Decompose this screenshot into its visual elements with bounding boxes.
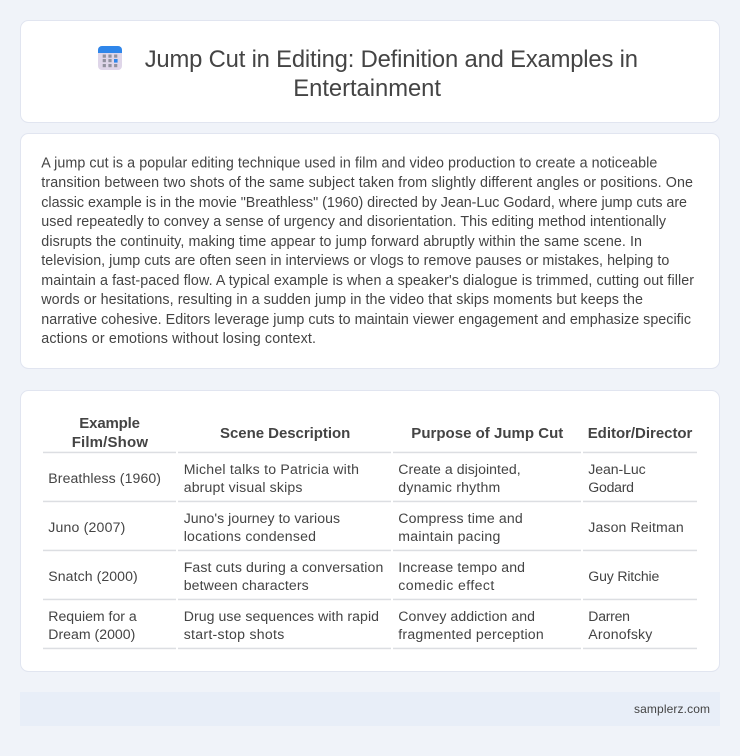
row: Requiem for a Dream: Darren xyxy=(588,608,630,624)
title xyxy=(145,46,638,102)
description text: classic example is in the movie "Breathless" (1960) directed by Jean-Luc Godard, where jump cuts are xyxy=(41,195,687,211)
icon: calendar xyxy=(98,46,122,70)
description text: maintain a fast-paced flow. A typical example is when a speaker's dialogue is trimmed, cutting out filler xyxy=(41,273,694,289)
row: Juno: Jason Reitman xyxy=(588,519,684,535)
table header: Film/Show xyxy=(72,434,148,451)
panel: examples table xyxy=(20,390,720,672)
row: Requiem for a Dream: start-stop shots xyxy=(184,626,284,642)
table header: Editor/Director xyxy=(588,425,693,442)
description text: disrupts the continuity, making time appear to jump forward abruptly within the same scene. In xyxy=(41,234,642,250)
table header: Purpose of Jump Cut xyxy=(411,425,563,442)
row: Snatch: Fast cuts during a conversation xyxy=(184,559,383,575)
row: Breathless: Create a disjointed, xyxy=(398,461,521,477)
row: Requiem for a Dream: Aronofsky xyxy=(588,626,653,642)
description text: actions or emotions without losing context. xyxy=(41,331,316,347)
row: Juno xyxy=(48,510,684,544)
row: Snatch: Increase tempo and xyxy=(398,559,525,575)
title card xyxy=(20,20,720,122)
table header: Scene Description xyxy=(220,425,350,442)
row: Juno: Compress time and xyxy=(398,510,523,526)
title: Jump Cut in Editing: Definition and Examples in xyxy=(145,46,638,73)
row: Juno: Juno (2007) xyxy=(48,519,125,535)
row: Snatch xyxy=(48,559,659,593)
description text: used repeatedly to convey a sense of urgency and disorientation. This editing method intentionally xyxy=(41,214,667,230)
row: Breathless: dynamic rhythm xyxy=(398,479,500,495)
description text: television, jump cuts are often seen in interviews or vlogs to remove pauses or mistakes, helping to xyxy=(41,253,669,269)
row: Requiem for a Dream: fragmented perception xyxy=(398,626,544,642)
row: Requiem for a Dream xyxy=(48,608,653,642)
footer: samplerz.com xyxy=(634,702,710,716)
description text: A jump cut is a popular editing technique used in film and video production to create a noticeable xyxy=(41,156,657,172)
title: Entertainment xyxy=(293,75,441,102)
row: Snatch: Snatch (2000) xyxy=(48,568,138,584)
row: Requiem for a Dream: Requiem for a xyxy=(48,608,137,624)
row: Breathless: Jean-Luc xyxy=(588,461,646,477)
description text: narrative cohesive. Editors leverage jump cuts to maintain viewer engagement and emphasize specific xyxy=(41,312,691,328)
row: Juno: maintain pacing xyxy=(398,528,500,544)
row: Breathless: Godard xyxy=(588,479,634,495)
table header xyxy=(72,415,693,451)
row: Snatch: Guy Ritchie xyxy=(588,568,659,584)
row: Requiem for a Dream: Convey addiction and xyxy=(398,608,535,624)
table header: Example xyxy=(79,415,140,432)
row: Breathless: Michel talks to Patricia with xyxy=(184,461,359,477)
row: Breathless xyxy=(48,461,646,495)
row: Breathless: Breathless (1960) xyxy=(48,470,161,486)
description text xyxy=(40,156,694,347)
row: Juno: locations condensed xyxy=(184,528,316,544)
row: Snatch: comedic effect xyxy=(398,577,494,593)
row: Juno: Juno's journey to various xyxy=(184,510,340,526)
description text: transition between two shots of the same subject taken from slightly different angles or positions. One xyxy=(41,175,693,191)
description text: words or hesitations, resulting in a sudden jump in the video that skips moments but keeps the xyxy=(40,292,643,308)
row: Snatch: between characters xyxy=(184,577,309,593)
panel: description xyxy=(20,134,720,368)
row: Breathless: abrupt visual skips xyxy=(184,479,302,495)
row: Requiem for a Dream: Drug use sequences with rapid xyxy=(184,608,379,624)
row: Requiem for a Dream: Dream (2000) xyxy=(48,626,135,642)
footer xyxy=(20,692,720,726)
